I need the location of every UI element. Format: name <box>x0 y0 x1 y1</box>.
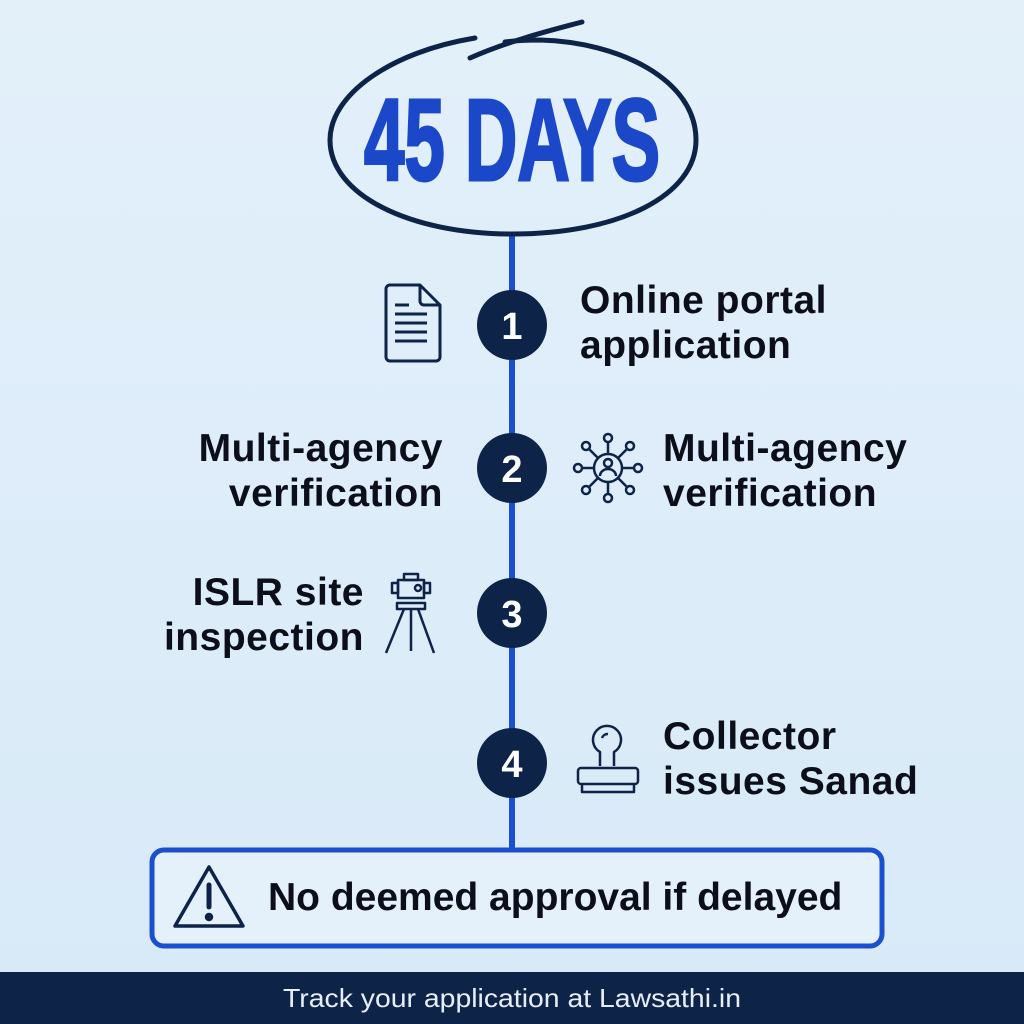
step 4 circle: 4 <box>501 744 523 786</box>
step 4 text <box>663 715 918 803</box>
step 3 circle <box>477 578 547 648</box>
warning box <box>152 850 882 946</box>
step 3 text: inspection <box>164 616 364 659</box>
step 2 left text: verification <box>229 472 443 515</box>
icon: warning <box>175 867 243 926</box>
timeline line <box>509 232 515 850</box>
step 2 right text: Multi-agency <box>663 427 907 470</box>
icon: stamp <box>578 726 638 792</box>
step 2 right text: verification <box>663 472 877 515</box>
step 4 circle <box>477 728 547 798</box>
step 2 left text: Multi-agency <box>199 427 443 470</box>
step 2 left text <box>199 427 443 515</box>
step 3 text <box>164 571 364 659</box>
step 3 circle: 3 <box>501 594 523 636</box>
step 1 circle: 1 <box>501 306 523 348</box>
step 2 circle: 2 <box>501 449 523 491</box>
warning text: No deemed approval if delayed <box>268 876 842 919</box>
step 4 text: Collector <box>663 715 837 758</box>
step 1 text: Online portal <box>580 279 827 322</box>
step 1 text: application <box>580 324 791 367</box>
title text: 45 DAYS <box>364 75 660 205</box>
icon: surveyor tripod <box>386 574 434 653</box>
step 4 text: issues Sanad <box>663 760 918 803</box>
step 2 circle <box>477 433 547 503</box>
step 1 text <box>580 279 827 367</box>
step 3 text: ISLR site <box>193 571 364 614</box>
step 2 right text <box>663 427 907 515</box>
step 1 circle <box>477 290 547 360</box>
title ellipse <box>330 22 696 234</box>
icon: network <box>574 434 642 502</box>
footer band <box>0 972 1024 1024</box>
icon: document <box>386 285 440 361</box>
footer band: Track your application at Lawsathi.in <box>283 983 741 1013</box>
